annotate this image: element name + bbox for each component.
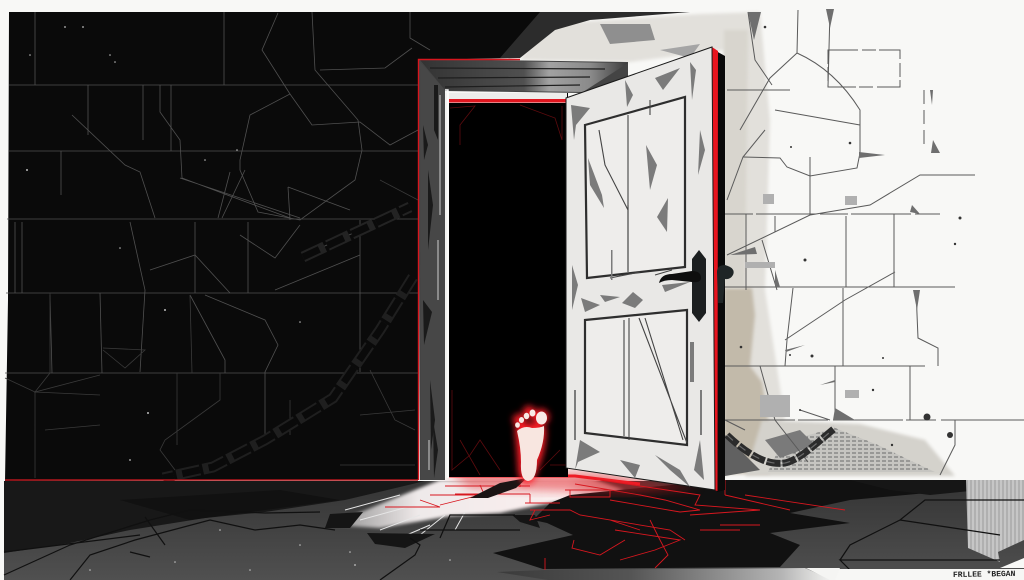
lower panel — [585, 310, 687, 445]
mortar lines and cracks — [5, 12, 430, 445]
frame header — [420, 60, 628, 92]
door opening: black interior — [445, 93, 568, 478]
top wall shadow edge — [500, 12, 690, 58]
door black edge — [716, 51, 725, 492]
open door — [566, 47, 734, 492]
grey wash near door — [520, 12, 785, 478]
panel: right stone wall — [520, 9, 1024, 478]
interior lintel — [448, 93, 567, 103]
floor speckle — [89, 529, 451, 571]
chain links on dark wall — [163, 207, 413, 478]
frame red outline — [418, 60, 520, 480]
upper panel — [585, 97, 685, 278]
hatch marks on stones — [745, 194, 859, 417]
signature: FRLLEE *BEGAN — [953, 570, 1016, 580]
hatched rubble — [768, 428, 935, 472]
door red edge — [712, 47, 718, 491]
door handle and plate — [659, 250, 734, 322]
lit patch — [330, 478, 625, 528]
icon: glowing foot — [513, 406, 549, 484]
frame left side shading — [420, 62, 445, 480]
grey floor cracks — [4, 500, 1024, 580]
dark back floor — [4, 481, 425, 553]
red floor glow — [447, 472, 700, 493]
panel: floor — [4, 472, 1024, 580]
crack wedges — [730, 9, 940, 420]
grey gouges — [571, 62, 705, 487]
panel: black left wall — [5, 12, 690, 481]
light bottom strip — [497, 568, 832, 580]
black cracked shadow — [493, 480, 975, 569]
wall cracks — [725, 10, 1024, 475]
white floor streaks — [345, 495, 465, 540]
interior red cracks — [450, 105, 566, 475]
white speckles — [26, 26, 301, 461]
red wall base line — [5, 479, 418, 481]
foot shadow — [470, 478, 527, 498]
door leaf — [566, 47, 715, 490]
speckles — [740, 26, 962, 446]
stone above door hatches — [600, 24, 655, 44]
toes — [515, 410, 547, 428]
beige stain — [724, 288, 775, 474]
gaps between slabs — [325, 512, 540, 548]
panel planks and scratches — [599, 100, 687, 443]
light right block — [966, 480, 1024, 562]
red brick lines and cracks — [385, 480, 845, 570]
foot sole — [517, 426, 544, 481]
door frame — [418, 59, 628, 480]
chain on floor edge — [727, 428, 835, 463]
foot glow — [513, 406, 549, 484]
